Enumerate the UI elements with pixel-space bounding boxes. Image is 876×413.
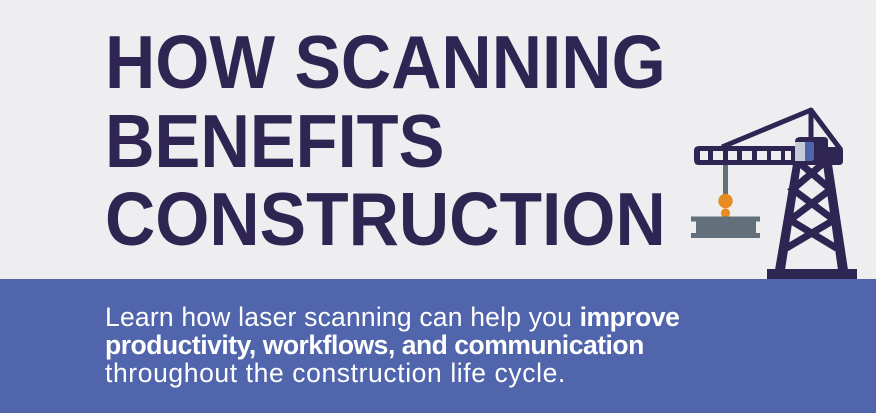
subtitle text: Learn how laser scanning can help you improve <box>105 302 679 332</box>
title <box>105 20 666 261</box>
title: CONSTRUCTION <box>105 177 666 261</box>
steel beam <box>691 216 760 238</box>
hook cable <box>723 165 728 197</box>
hook ball <box>718 194 733 208</box>
cab window <box>795 142 805 161</box>
jib <box>694 146 800 165</box>
cab <box>795 137 843 165</box>
subtitle text: throughout the construction life cycle. <box>105 358 566 388</box>
panel: subtitle band <box>0 279 876 413</box>
tower <box>775 163 848 270</box>
tower base <box>767 269 857 279</box>
title: HOW SCANNING <box>105 20 666 104</box>
subtitle text: productivity, workflows, and communication <box>105 330 644 360</box>
subtitle text <box>105 302 679 388</box>
title: BENEFITS <box>105 99 444 183</box>
jib cables <box>722 110 841 150</box>
